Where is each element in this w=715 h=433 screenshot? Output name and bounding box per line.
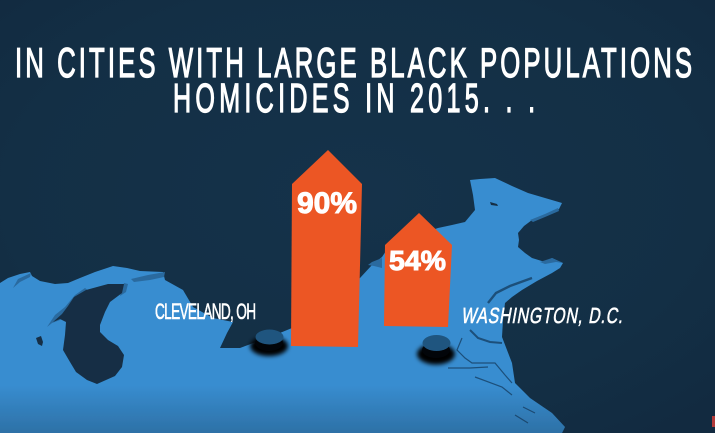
label: Cleveland: CLEVELAND, OH <box>155 299 256 324</box>
bar: Washington 54% <box>384 213 452 327</box>
value 90%: 90% <box>297 187 357 220</box>
inland lake <box>490 202 498 206</box>
Chesapeake Bay and coastal inlets <box>448 278 535 423</box>
value 54%: 54% <box>389 245 446 276</box>
title <box>15 41 692 122</box>
title line 1: IN CITIES WITH LARGE BLACK POPULATIONS <box>15 41 692 87</box>
red corner mark <box>712 416 715 427</box>
Lake Michigan <box>53 284 124 384</box>
Washington marker <box>417 335 455 364</box>
bar: Cleveland 90% <box>291 150 362 347</box>
label: Washington: WASHINGTON, D.C. <box>460 304 626 329</box>
Cleveland marker <box>250 330 288 356</box>
small lake <box>36 336 43 346</box>
map of the eastern United States <box>0 178 565 433</box>
southern fade <box>0 385 565 433</box>
Lake Superior and Huron shore shading <box>13 272 165 327</box>
coastal shading <box>368 208 563 268</box>
title line 2: HOMICIDES IN 2015. . . <box>173 77 535 122</box>
